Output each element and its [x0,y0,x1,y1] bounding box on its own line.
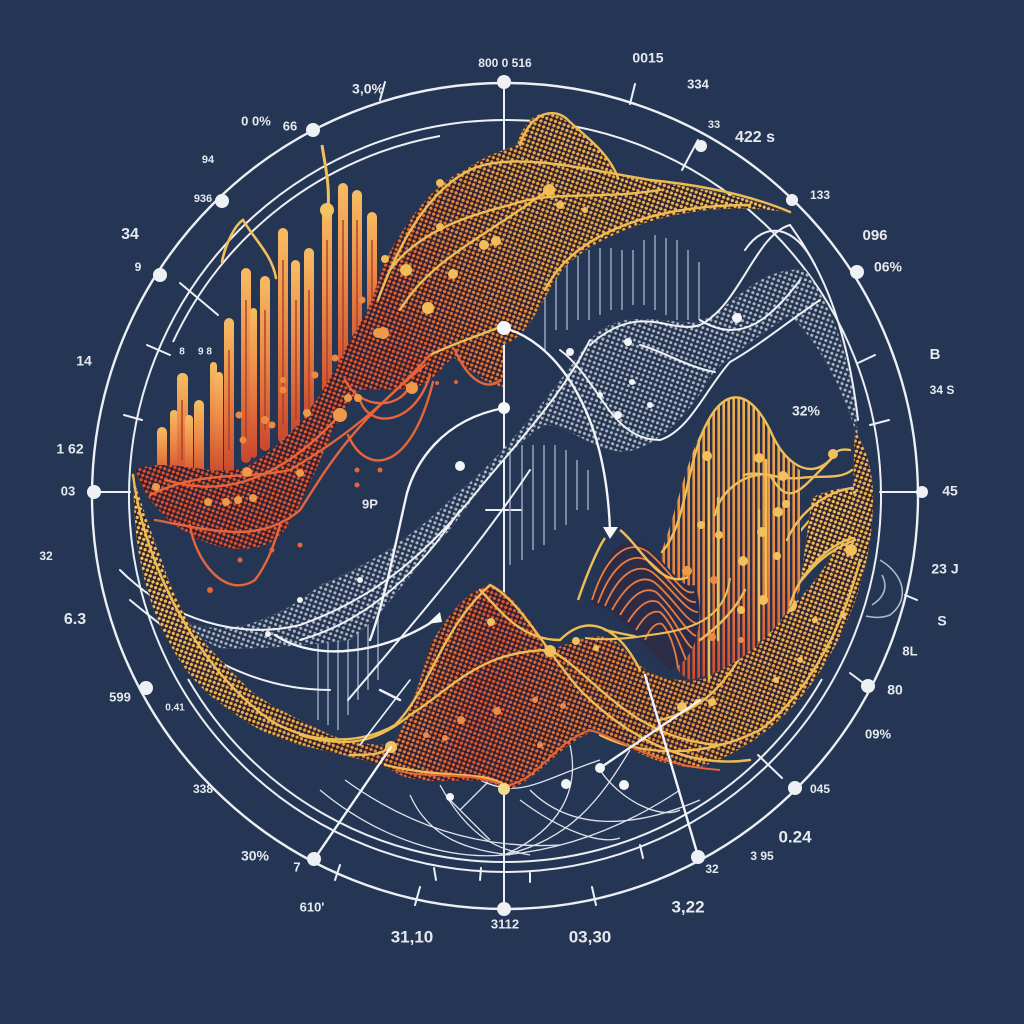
dial labels: 6.3 [64,611,86,628]
dial labels: 800 0 516 [478,56,532,70]
dial labels: 34 [121,226,139,243]
dial labels: 32 [39,549,53,563]
dial labels: 03 [61,483,75,498]
dial labels: 33 [708,119,720,131]
dial labels: 06% [874,259,903,275]
dial labels: 1 62 [56,441,84,457]
dial labels: 31,10 [391,927,433,946]
dial labels [39,50,959,946]
dial labels: 3112 [491,916,519,931]
dial labels: 8 [179,347,185,358]
dial labels: 133 [810,188,830,202]
white arc arrow with nodes [275,321,700,858]
dial labels: 66 [283,118,297,133]
dial labels: 34 S [930,383,954,397]
dial labels: 936 [194,193,212,205]
dial labels: 30% [241,848,270,864]
dial labels: 8L [902,643,918,658]
dial nodes [87,75,928,916]
dial labels: 23 J [931,561,959,577]
dial labels: 0 0% [241,113,271,128]
orange bar chart [157,183,377,485]
dial labels: 0.24 [778,827,812,846]
gray vertical lines behind gray wave [318,235,699,730]
dial labels: 338 [193,782,213,796]
dial labels: S [937,613,947,629]
dial labels: 9 8 [198,347,212,358]
dial labels: 14 [76,353,92,369]
dial labels: 80 [887,682,903,698]
dial labels: 0015 [632,50,664,66]
bottom web lines [320,745,700,856]
dial labels: 3 95 [750,849,774,863]
dial labels: 9P [362,496,378,511]
lower gold and red crescent [133,432,873,795]
striped red hill [578,530,730,670]
dial labels: 03,30 [569,927,611,946]
dial labels: 3,22 [671,897,705,916]
dial labels: 94 [202,154,215,166]
dial labels: 096 [862,227,888,244]
top gold and red band [135,113,790,585]
right orange hump chart [660,397,853,680]
gray wave band [120,225,858,700]
dial labels: B [930,346,941,363]
bar texture and connector [182,145,483,593]
dial labels: 09% [865,726,891,741]
dial tick marks [94,82,917,908]
right side gray arcs [866,560,902,617]
dial labels: 610' [300,899,324,914]
dial labels: 045 [810,782,830,796]
dial labels: 32% [792,403,821,419]
dial labels: 599 [109,689,131,704]
radial dial rings [92,83,918,909]
dial labels: 9 [135,260,142,274]
dial labels: 0.41 [165,703,185,714]
dial labels: 3,0% [352,81,385,97]
dial labels: 32 [705,862,719,876]
dial labels: 422 s [735,129,775,146]
dial labels: 45 [942,483,958,499]
dial labels: 334 [687,76,710,91]
dial labels: 7 [293,859,301,874]
